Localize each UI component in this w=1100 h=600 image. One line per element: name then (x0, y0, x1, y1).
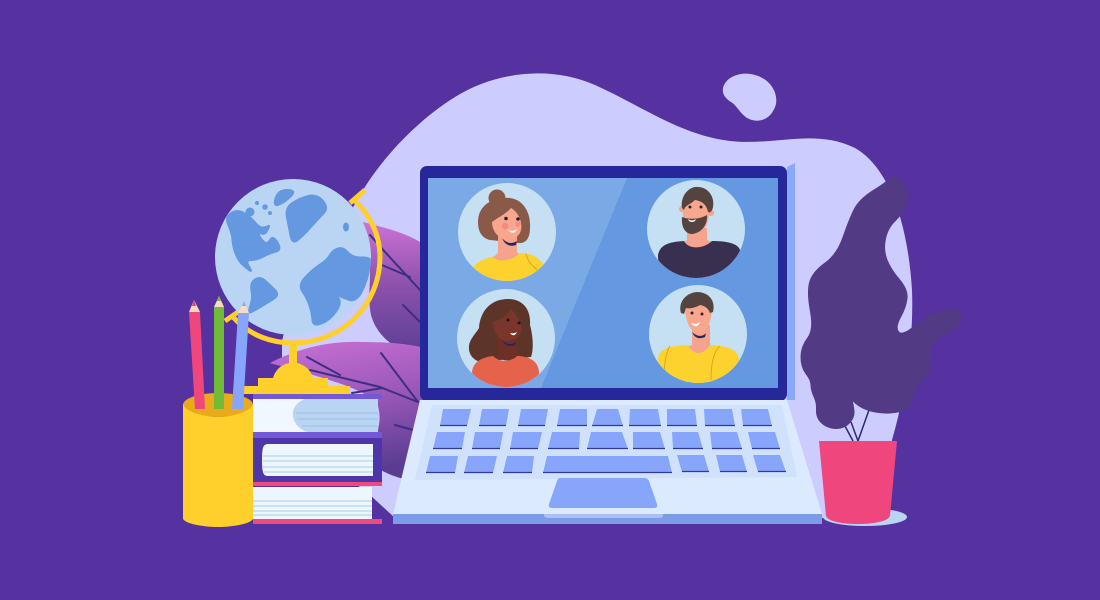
leaf: upper (363, 222, 425, 358)
leaf: lower (270, 342, 425, 482)
book: bottom (253, 487, 372, 519)
laptop (393, 163, 822, 524)
blob: large backdrop (282, 73, 912, 518)
illustration: online class scene (183, 73, 962, 527)
leaf veins (307, 235, 420, 430)
plant stems (845, 410, 869, 441)
book stack (253, 394, 382, 524)
book: top (253, 394, 382, 399)
avatar: bearded man (647, 180, 745, 280)
laptop bezel (420, 166, 787, 401)
cup inner (183, 393, 253, 417)
cup body (183, 404, 253, 527)
plant pot (819, 441, 897, 524)
globe sphere (215, 179, 371, 335)
pencil cup (183, 296, 253, 527)
globe stand (243, 343, 350, 394)
plant foliage (802, 178, 961, 428)
laptop screen (428, 178, 778, 388)
plant leaves behind globe and laptop (270, 222, 425, 482)
avatar: woman with bun (458, 183, 556, 290)
screen reflection (428, 178, 627, 388)
trackpad (549, 478, 657, 508)
laptop lid side (787, 163, 795, 400)
pencil: pink (189, 300, 205, 409)
laptop base top (393, 400, 822, 514)
pencil: blue (232, 301, 249, 409)
pot plate (823, 508, 907, 526)
globe (215, 179, 380, 394)
keyboard deck (415, 405, 797, 480)
globe arc end ticks (225, 190, 365, 321)
potted plant (802, 178, 961, 526)
avatar: woman with curly hair (457, 289, 555, 395)
pencil: green (214, 296, 224, 409)
globe arc (233, 199, 380, 343)
book: middle (253, 438, 382, 482)
avatar: young man (649, 285, 747, 385)
laptop notch (544, 514, 663, 518)
laptop front edge (393, 514, 822, 524)
key shadows (426, 426, 786, 472)
keyboard keys (426, 409, 786, 473)
continents (227, 190, 372, 325)
blob: small floating (723, 74, 776, 121)
